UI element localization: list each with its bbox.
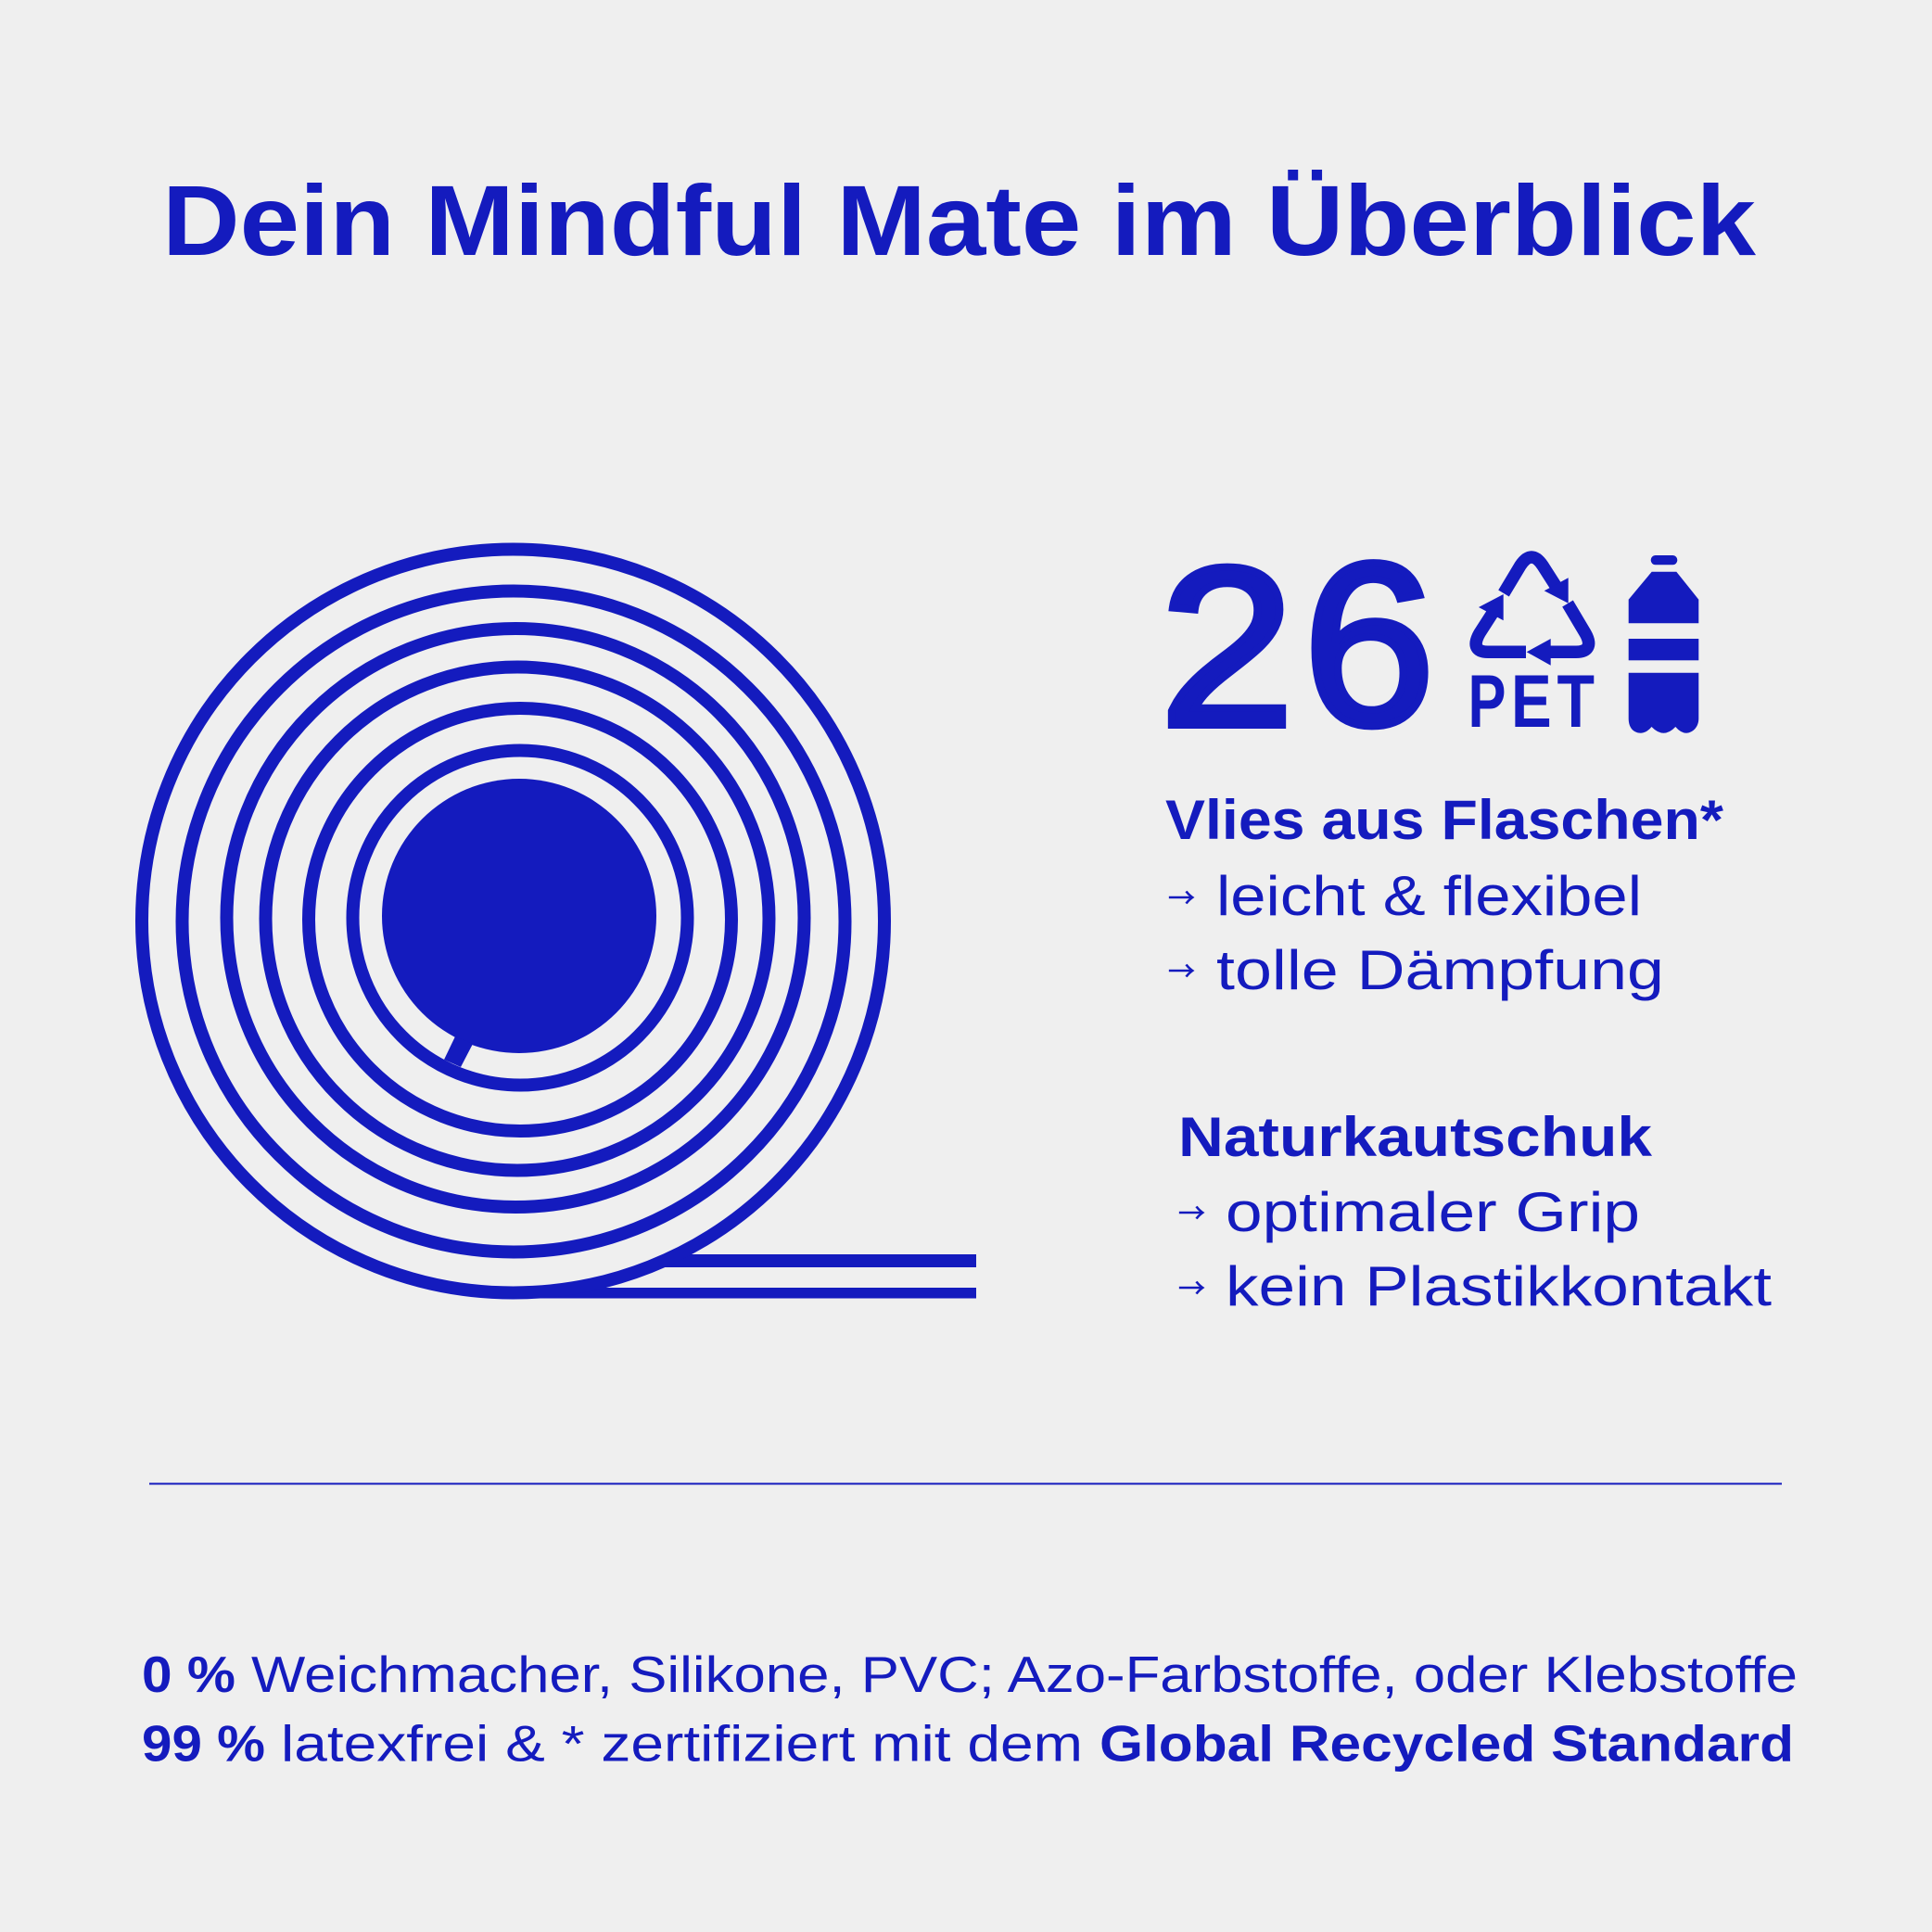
number 26: 2 bbox=[1160, 520, 1294, 773]
footer line 2: 99 % bbox=[142, 1715, 265, 1773]
bullet: leicht und flexibel: → bbox=[1168, 877, 1195, 916]
icon: plastic bottle bbox=[1629, 555, 1698, 733]
number 26 bbox=[1160, 515, 1435, 773]
label PET: T bbox=[1557, 660, 1595, 744]
footer line 2: Global Recycled Standard bbox=[1099, 1715, 1794, 1773]
text block: Naturkautschuk bbox=[1178, 1106, 1772, 1317]
heading: Vlies aus Flaschen: Vlies aus Flaschen* bbox=[1165, 789, 1724, 851]
illustration: rolled yoga mat bbox=[142, 549, 976, 1293]
bullet: optimaler Grip: → bbox=[1178, 1192, 1205, 1231]
number 26: 6 bbox=[1303, 515, 1435, 773]
label PET bbox=[1468, 660, 1595, 744]
mat layers: concentric coils bbox=[142, 549, 884, 1292]
mat core: solid disk with stub bbox=[382, 779, 656, 1067]
label PET: P bbox=[1468, 660, 1506, 744]
bullet: leicht und flexibel: leicht & flexibel bbox=[1216, 865, 1642, 927]
footer line 1: Weichmacher, Silikone, PVC; Azo-Farbstoffe, oder Klebstoffe bbox=[251, 1646, 1798, 1703]
bullet: kein Plastikkontakt: → bbox=[1178, 1267, 1205, 1306]
icon: 26 PET recycling code with bottle bbox=[1160, 515, 1698, 773]
footer line 2: latexfrei & * zertifiziert mit dem bbox=[281, 1715, 1083, 1773]
bullet: tolle Dämpfung: tolle Dämpfung bbox=[1216, 939, 1664, 1001]
icon: recycling triangle bbox=[1476, 557, 1589, 666]
heading: Naturkautschuk: Naturkautschuk bbox=[1178, 1106, 1653, 1168]
footer line 1: 0 % bbox=[142, 1646, 235, 1703]
text block: Vlies aus Flaschen bbox=[1165, 789, 1724, 1001]
bullet: tolle Dämpfung: → bbox=[1168, 950, 1195, 989]
bullet: optimaler Grip: optimaler Grip bbox=[1226, 1181, 1640, 1243]
mat ends: two straight lines bbox=[519, 1261, 976, 1293]
title: Dein Mindful Mate im Überblick bbox=[162, 164, 1757, 276]
label PET: E bbox=[1511, 660, 1552, 744]
footer line 2 bbox=[142, 1715, 1794, 1773]
footer text bbox=[142, 1646, 1798, 1773]
bullet: kein Plastikkontakt: kein Plastikkontakt bbox=[1226, 1255, 1772, 1317]
